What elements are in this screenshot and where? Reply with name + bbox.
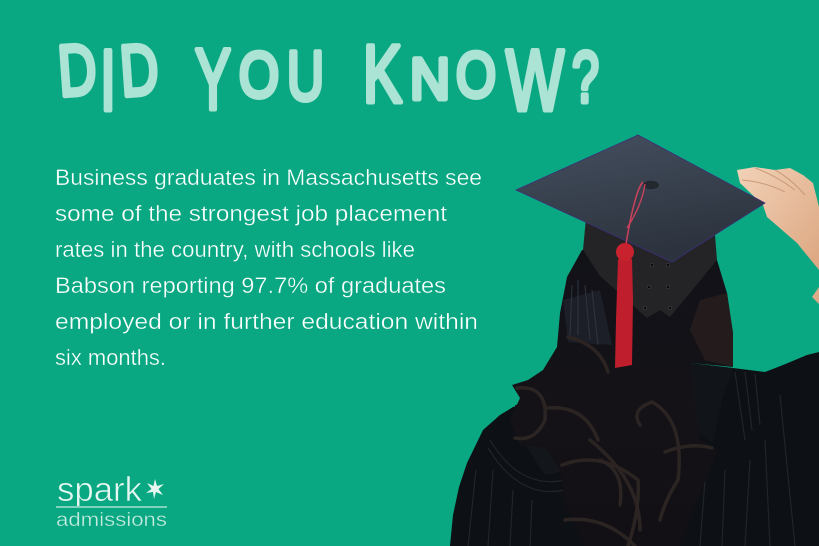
title: U xyxy=(287,37,324,115)
lacing xyxy=(643,263,672,310)
title: D xyxy=(56,30,99,112)
cap button xyxy=(643,181,659,189)
title: D xyxy=(118,30,161,112)
hand xyxy=(737,167,819,270)
title: O xyxy=(456,39,496,111)
logo star xyxy=(146,479,164,499)
title: I xyxy=(100,33,116,129)
cap top xyxy=(516,135,765,262)
logo xyxy=(56,471,167,531)
gown xyxy=(450,352,819,546)
body text: Babson reporting 97.7% of graduates xyxy=(55,273,446,298)
title: ? xyxy=(572,38,599,118)
body text: rates in the country, with schools like xyxy=(55,237,415,262)
body text xyxy=(55,165,482,370)
body text: employed or in further education within xyxy=(55,309,478,334)
body text: some of the strongest job placement xyxy=(55,201,447,226)
title: Y xyxy=(195,32,231,128)
title xyxy=(56,29,599,129)
cap band xyxy=(583,218,717,318)
body text: Business graduates in Massachusetts see xyxy=(55,165,482,190)
title: N xyxy=(410,47,450,112)
hair curls xyxy=(515,337,712,546)
body text: six months. xyxy=(55,345,166,370)
graduate photo illustration xyxy=(450,135,819,546)
title: W xyxy=(506,33,564,129)
title: O xyxy=(239,39,279,111)
hair xyxy=(510,250,733,546)
logo wordmark: spark xyxy=(57,471,143,509)
tassel xyxy=(615,182,645,368)
logo subtitle: admissions xyxy=(56,510,167,531)
title: K xyxy=(363,29,402,120)
